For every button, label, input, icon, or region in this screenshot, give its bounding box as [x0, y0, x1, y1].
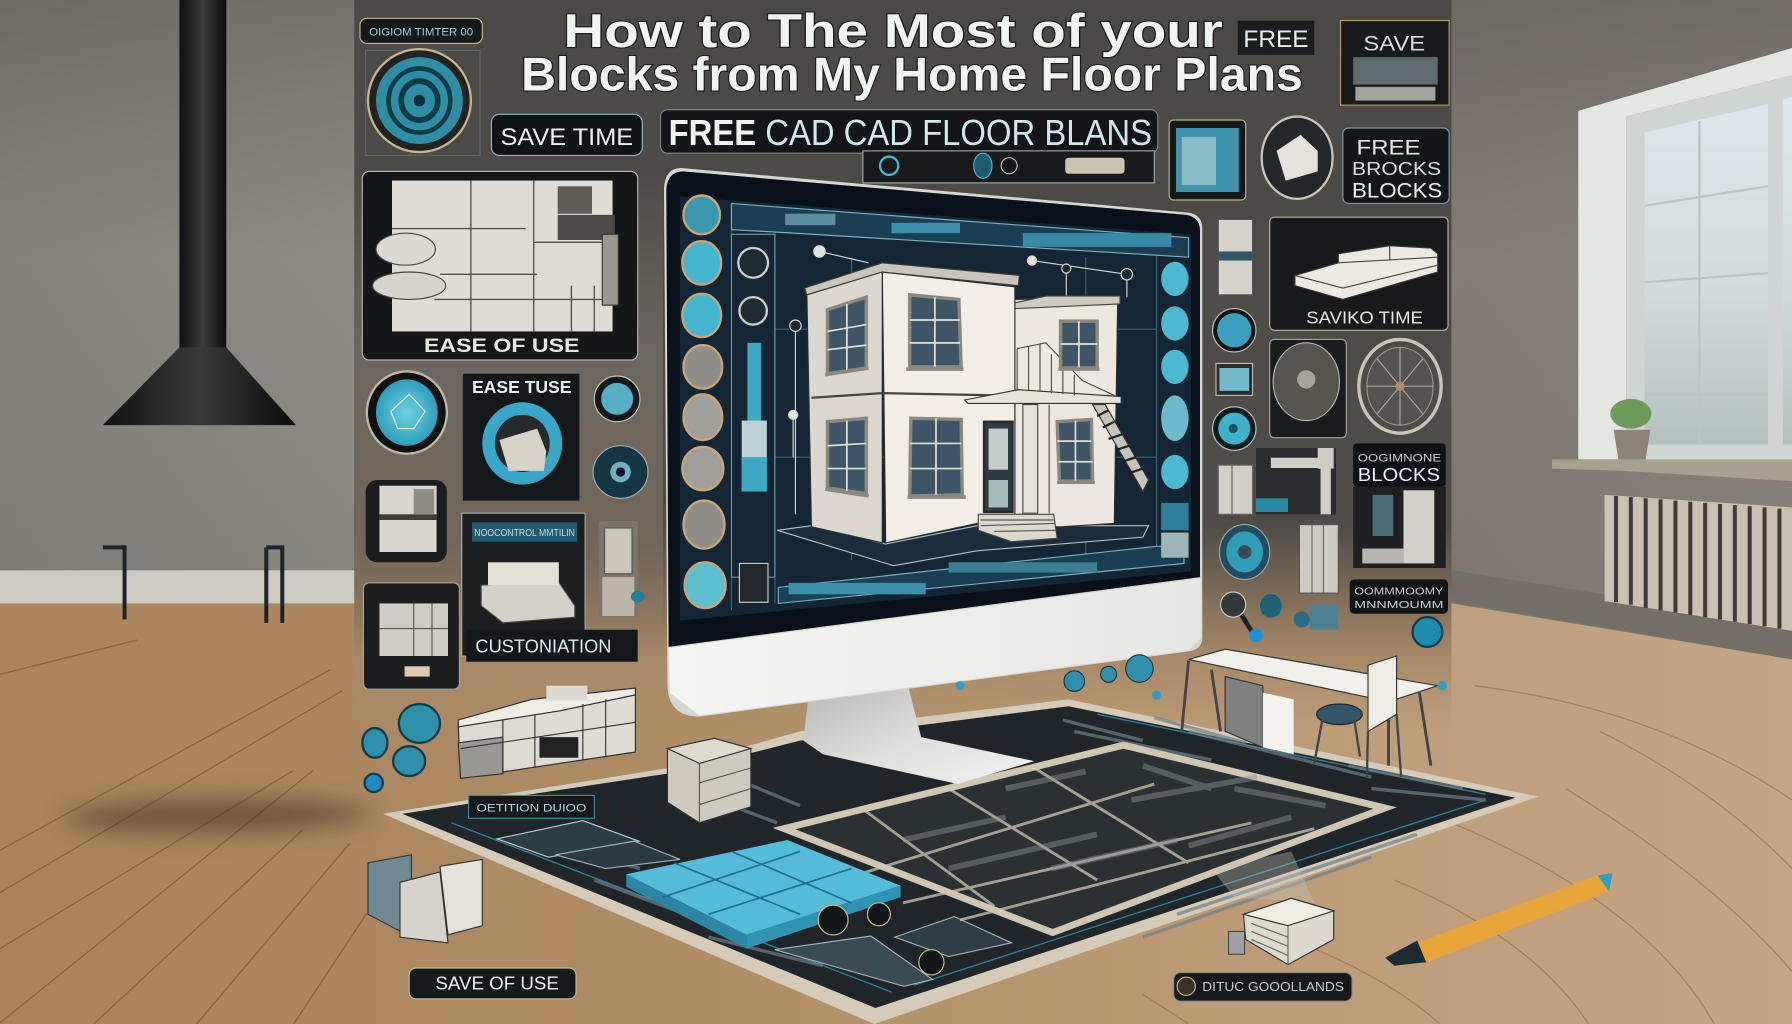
- 3D house model: [777, 263, 1149, 566]
- save time tag: [491, 114, 642, 155]
- floor band: [811, 393, 1121, 398]
- monitor bezel: [666, 171, 1200, 647]
- CAD screen: [680, 197, 1191, 621]
- kitchen units: [458, 686, 635, 778]
- mat label: OETITION DUIOO: [477, 802, 586, 814]
- title line 1: How to The Most of your: [563, 5, 1223, 57]
- chair: [1314, 656, 1401, 777]
- L-shaped plan: [1256, 448, 1336, 514]
- fire escape stairs: [1093, 405, 1149, 491]
- icon: blue plan circle: [1213, 309, 1256, 352]
- windows: [827, 295, 1097, 496]
- desk: [1182, 649, 1438, 766]
- top toolbar: [731, 203, 1189, 257]
- small window tile: [1216, 363, 1253, 395]
- circle appliance icon: [1262, 117, 1333, 199]
- floor mat blueprint: [383, 699, 1538, 1024]
- panel: customisation: [462, 513, 638, 662]
- monitor: [664, 168, 1202, 717]
- save of use tag: [409, 968, 576, 999]
- top-left label: [360, 18, 482, 43]
- left wall: [807, 270, 882, 543]
- small mat furniture: [497, 821, 1011, 986]
- wing: [1015, 297, 1118, 527]
- icon: radial dial: [366, 49, 480, 155]
- window sills: [825, 368, 1099, 497]
- small stands: [103, 547, 282, 623]
- top-left label: OIGIOM TIMTER 00: [369, 26, 473, 38]
- bottom plans tag: [1174, 973, 1352, 1001]
- dimension nodes: [789, 246, 1133, 514]
- right round icons: [1161, 262, 1189, 558]
- nightstand: [667, 738, 751, 823]
- panel: customisation: NOOCONTROL MMTILIN: [474, 528, 575, 539]
- roof cornice: [805, 263, 1019, 295]
- cabinet panel: [1353, 487, 1446, 568]
- pencil: [1385, 873, 1613, 966]
- plant: [1610, 399, 1651, 459]
- porch steps: [978, 514, 1057, 542]
- panel: ease of use floor plan: [362, 171, 638, 360]
- bottom toolbar: [778, 546, 1184, 603]
- connector nodes: [955, 655, 1447, 699]
- panel: ease of use floor plan: EASE OF USE: [424, 335, 579, 357]
- baseboard: [0, 569, 1792, 659]
- panel: customisation: CUSTONIATION: [475, 636, 611, 657]
- monitor stand: [803, 683, 1034, 784]
- left tool column: [731, 234, 775, 602]
- room wall: [0, 0, 1792, 640]
- bottom right tag: [1350, 579, 1448, 647]
- infographic overlay panel: [354, 0, 1451, 731]
- left round icons: [682, 195, 726, 608]
- bottom right icons: [1259, 593, 1338, 630]
- bottom right tag: OOMMMOOMY: [1354, 586, 1444, 597]
- floor: [0, 603, 1792, 1024]
- save panel: [1341, 21, 1449, 105]
- panel: ease tuse: [463, 374, 579, 501]
- mat label: [469, 795, 594, 818]
- screen card: [1169, 120, 1246, 200]
- floor plan outline on mat: [784, 745, 1385, 933]
- free blocks panel: BROCKS: [1352, 158, 1441, 179]
- save of use tag: SAVE OF USE: [435, 973, 559, 994]
- free blocks panel: FREE: [1357, 134, 1421, 159]
- free tag: FREE: [1243, 26, 1309, 53]
- free cad tag: FREE CAD CAD FLOOR BLANS: [669, 112, 1152, 153]
- columns: [1023, 405, 1049, 513]
- fan panel: [1270, 339, 1346, 438]
- tall white cabinet: [1218, 219, 1253, 295]
- monitor body: [664, 168, 1202, 717]
- teal spirals: [362, 704, 440, 792]
- ground plan: [777, 526, 1149, 566]
- blocks tag: [1353, 443, 1446, 487]
- wardrobe tile: [1218, 465, 1253, 514]
- icon: camera lens: [593, 446, 648, 498]
- ceiling hood lamp: [103, 0, 296, 425]
- blocks tag: OOGIMNONE: [1358, 453, 1442, 465]
- save panel: SAVE: [1363, 30, 1425, 55]
- window: [1552, 48, 1792, 481]
- bottom right tag: MNNMOUMM: [1354, 600, 1443, 611]
- door: [984, 422, 1013, 512]
- title: [521, 5, 1303, 100]
- paper stack block: [1229, 898, 1334, 965]
- balcony railing: [1017, 343, 1114, 395]
- panel: small cabinet: [366, 480, 447, 562]
- fan wheel: [1359, 339, 1441, 433]
- bottom plans tag: DITUC GOOOLLANDS: [1202, 980, 1344, 994]
- icon: teal circle: [1213, 407, 1256, 450]
- panel: saving time sofa: SAVIKO TIME: [1306, 307, 1423, 327]
- white blocks stack: [368, 855, 482, 943]
- window muntins: [827, 297, 1097, 495]
- spiral dial: [1219, 525, 1270, 579]
- icon: small house circle: [594, 376, 640, 422]
- panel: small plan: [363, 583, 459, 689]
- icon: blue circle plan: [367, 371, 447, 454]
- monitor chin: [669, 578, 1201, 715]
- radiator: [1605, 495, 1792, 631]
- panel: ease tuse: EASE TUSE: [472, 377, 571, 397]
- mat dial markers: [818, 903, 890, 935]
- front wall: [882, 272, 1015, 543]
- title line 2: Blocks from My Home Floor Plans: [521, 48, 1303, 100]
- lower wardrobe: [1299, 525, 1338, 593]
- panel: saving time sofa: [1270, 217, 1448, 330]
- free blocks panel: BLOCKS: [1352, 178, 1442, 203]
- free blocks panel: [1343, 128, 1449, 203]
- blue furniture blocks: [626, 840, 901, 949]
- magnifier: [1221, 592, 1263, 642]
- blocks tag: BLOCKS: [1358, 464, 1440, 485]
- balcony roof: [965, 390, 1121, 403]
- wardrobe icon: [599, 521, 645, 617]
- screen grid: [731, 203, 1157, 610]
- icon strip: [863, 151, 1154, 183]
- save time tag: SAVE TIME: [501, 124, 633, 151]
- free tag: [1238, 21, 1314, 55]
